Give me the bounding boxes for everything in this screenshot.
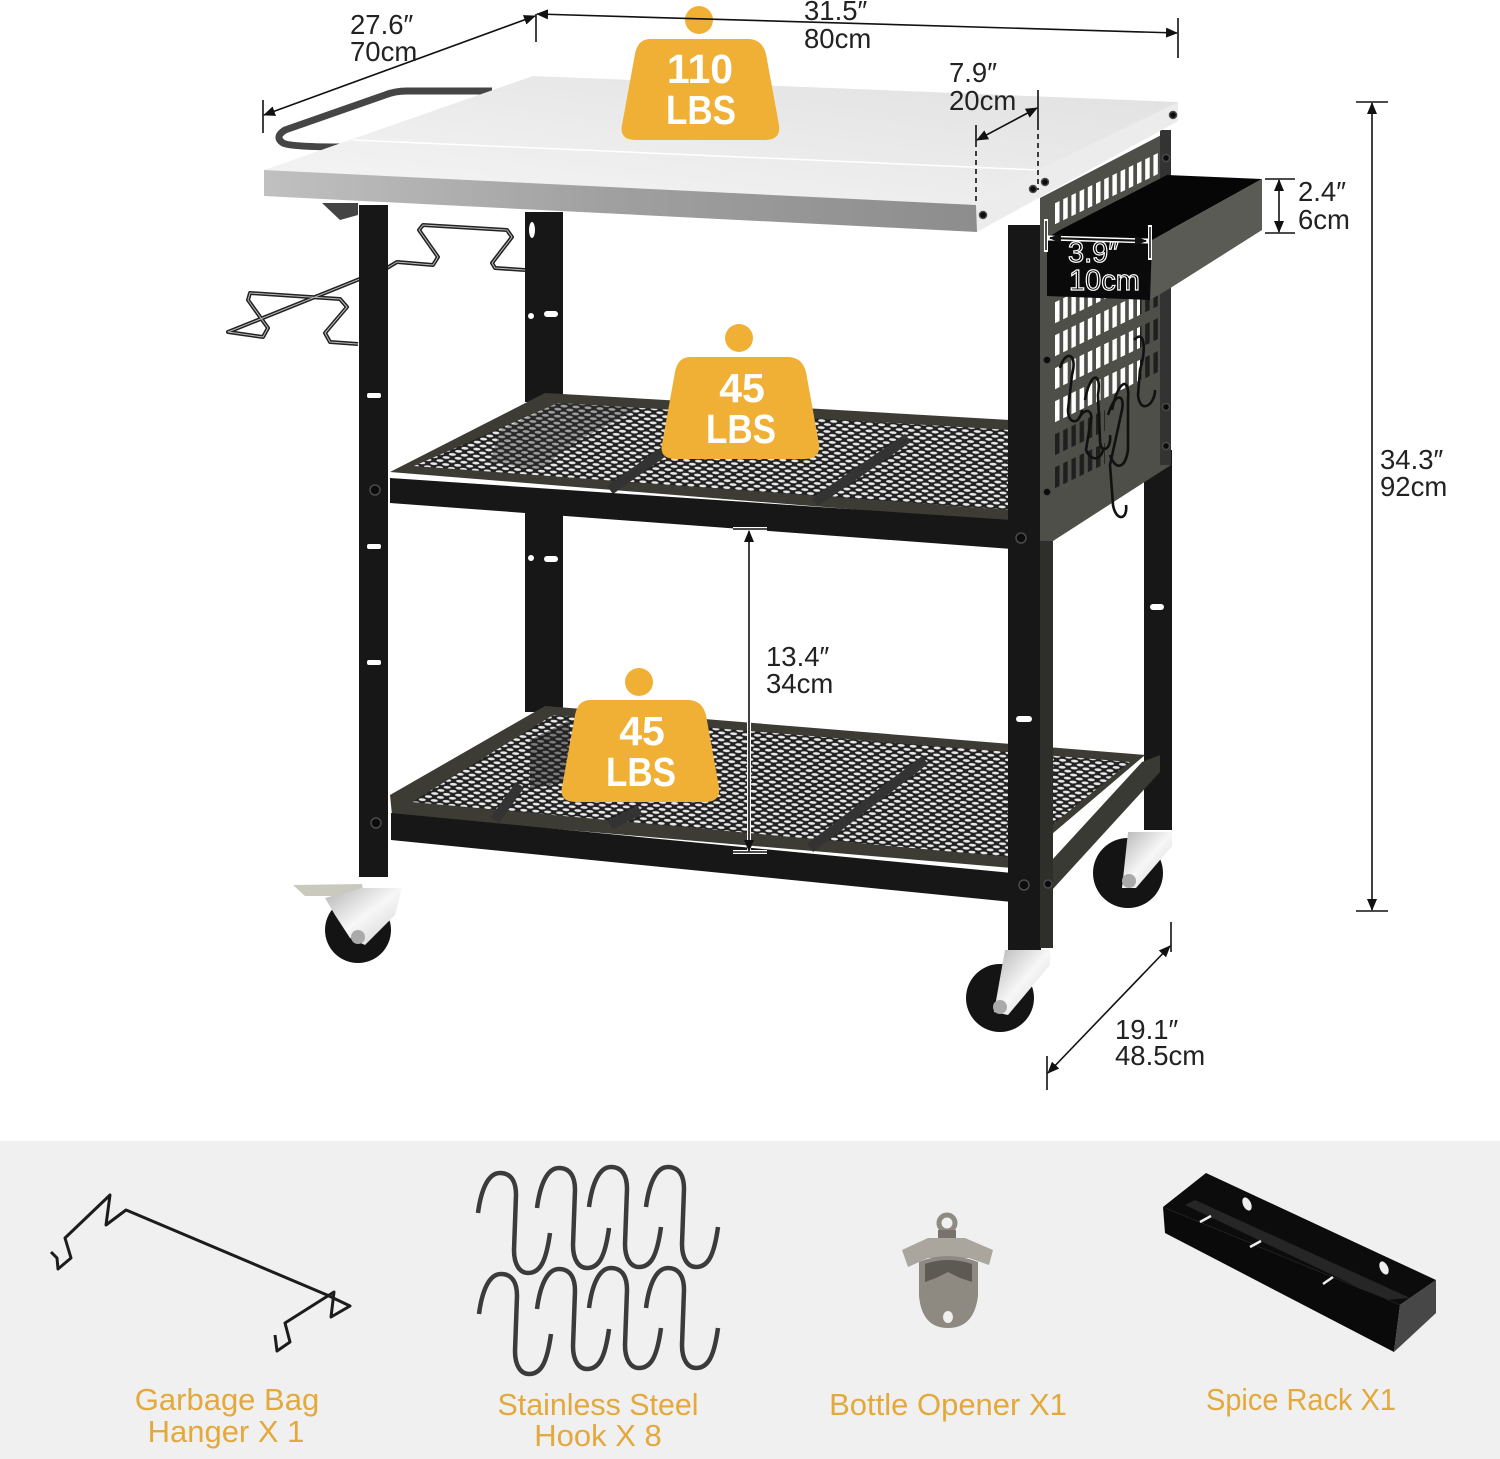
accessory: bottle opener <box>902 1215 993 1328</box>
weight badge: 45 lbs bottom: LBS <box>606 749 676 795</box>
dimension: shelf gap 13.4 <box>733 529 833 852</box>
dimension: width 31.5: 80cm <box>804 23 871 54</box>
back leg holes <box>528 222 1164 610</box>
accessory: garbage bag hanger <box>51 1195 350 1351</box>
dimension: depth 27.6: 70cm <box>350 36 417 67</box>
dimension: height 34.3: 92cm <box>1380 471 1447 502</box>
weight badge: 45 lbs bottom <box>562 668 719 802</box>
accessory: stainless steel hooks <box>478 1167 718 1374</box>
bottom shelf <box>390 706 1160 902</box>
dimension: width 31.5 <box>537 0 1178 58</box>
dimension: height 34.3 <box>1356 102 1447 911</box>
label: spice rack: Spice Rack X1 <box>1206 1382 1396 1417</box>
dimension: depth 27.6 <box>263 9 536 133</box>
label: garbage bag hanger: Garbage Bag <box>135 1382 319 1417</box>
rivets <box>370 485 1052 890</box>
dimension: rack height 2.4 <box>1265 176 1350 235</box>
weight badge: 45 lbs bottom: 45 <box>619 708 665 754</box>
accessory: spice rack <box>1163 1173 1436 1352</box>
front right leg <box>1008 225 1053 950</box>
weight badge: 45 lbs middle <box>662 324 819 459</box>
dimension: rack height 2.4: 2.4″ <box>1298 176 1346 207</box>
spice rack on cart <box>1047 175 1262 300</box>
dimension: 7.9 <box>949 57 1038 205</box>
caster: back right <box>1093 832 1172 908</box>
weight badge: 110 lbs <box>622 6 779 140</box>
dimension: shelf gap 13.4: 34cm <box>766 668 833 699</box>
label: hooks <box>498 1387 698 1453</box>
dimension: rack width 3.9: 10cm <box>1069 265 1140 297</box>
cart illustration <box>228 76 1262 1032</box>
accessories panel <box>0 1141 1500 1459</box>
label: hooks: Stainless Steel <box>498 1387 698 1422</box>
side panel <box>1040 130 1171 541</box>
caster: front right <box>966 950 1050 1032</box>
dimension: rack width 3.9: 3.9″ <box>1068 237 1119 269</box>
hooks on cart <box>1060 337 1155 517</box>
dimension: 7.9: 7.9″ <box>949 57 997 88</box>
label: hooks: Hook X 8 <box>534 1418 662 1453</box>
caster: front left <box>293 884 402 963</box>
label: bottle opener: Bottle Opener X1 <box>829 1387 1067 1422</box>
dimension: shelf gap 13.4: 13.4″ <box>766 641 830 672</box>
label: garbage bag hanger: Hanger X 1 <box>148 1414 304 1449</box>
top bracket <box>322 203 358 220</box>
handle <box>279 91 492 147</box>
leg holes <box>367 393 1032 722</box>
dimension: rack height 2.4: 6cm <box>1298 204 1350 235</box>
dimension: height 34.3: 34.3″ <box>1380 444 1444 475</box>
dimension: depth 27.6: 27.6″ <box>350 9 414 40</box>
weight badge: 110 lbs: 110 <box>667 46 733 92</box>
dimension: leg depth 19.1: 48.5cm <box>1115 1040 1205 1071</box>
casters <box>293 832 1172 1032</box>
tabletop <box>264 76 1178 232</box>
weight badge: 45 lbs middle: 45 <box>719 365 765 411</box>
back legs <box>525 212 1172 830</box>
dimension: 7.9: 20cm <box>949 85 1016 116</box>
dimension: leg depth 19.1 <box>1047 922 1205 1090</box>
garbage bag hanger on cart <box>228 225 525 344</box>
weight badge: 45 lbs middle: LBS <box>706 406 776 452</box>
middle shelf <box>390 393 1012 549</box>
dimension: rack width 3.9 <box>1046 219 1150 297</box>
front left leg <box>359 205 388 877</box>
dimension: leg depth 19.1: 19.1″ <box>1115 1014 1179 1045</box>
label: garbage bag hanger <box>135 1382 319 1449</box>
weight badge: 110 lbs: LBS <box>666 87 736 133</box>
